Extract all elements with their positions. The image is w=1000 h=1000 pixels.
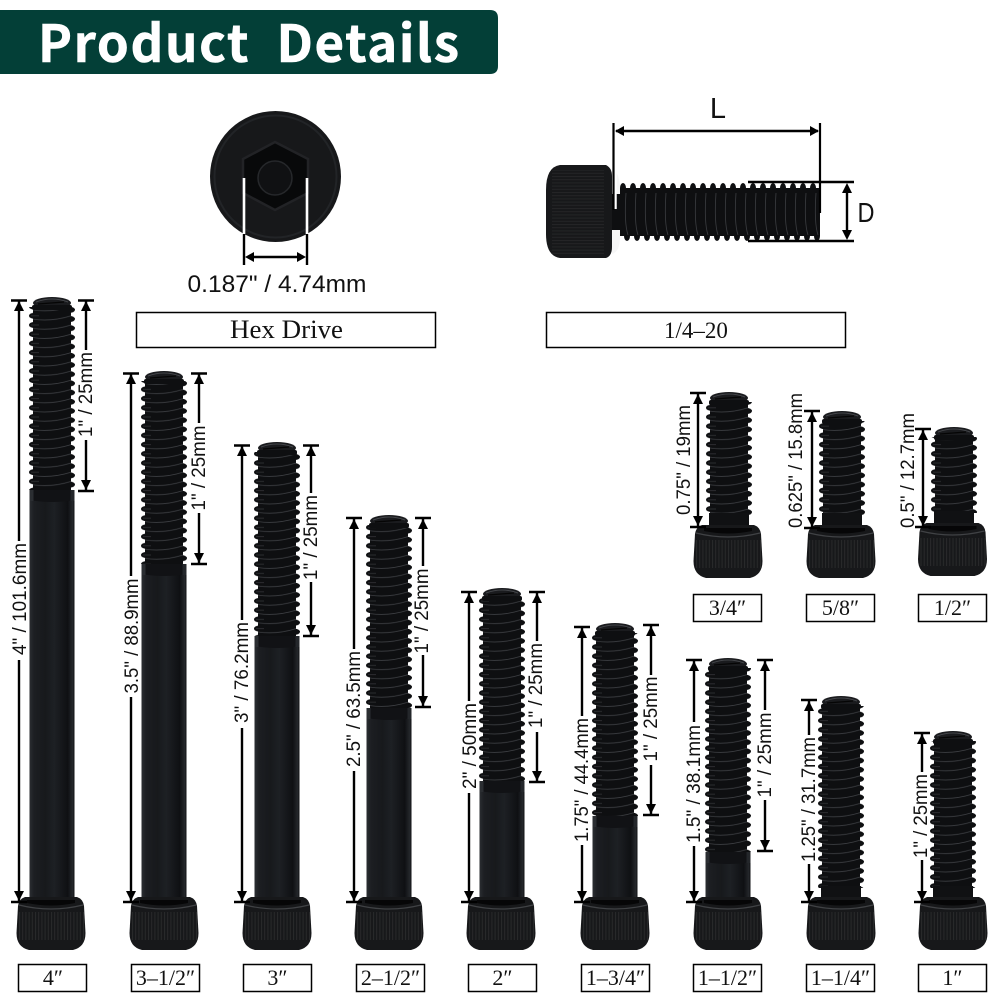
dimension letter D: D (858, 197, 874, 228)
dimension: 3 inch overall (231, 446, 253, 902)
dimension: 1 inch overall (910, 733, 932, 902)
size label 3: 3″ (267, 965, 288, 990)
size label 1-3/4: 1–3/4″ (586, 965, 645, 990)
hex drive size text: 0.187" / 4.74mm (188, 271, 366, 298)
bolt 5/8 inch (806, 411, 876, 578)
bolt 1 inch (918, 731, 988, 950)
dimension: 3/4 inch overall (673, 393, 706, 527)
size label 3 (244, 964, 312, 992)
dimension: 3-1/2 inch thread (188, 374, 210, 564)
dimension: 3 inch overall: 3" / 76.2mm (231, 622, 253, 723)
bolt 1-1/4 inch (806, 696, 876, 950)
dimension: 1-3/4 inch overall: 1.75" / 44.4mm (571, 718, 593, 842)
size label 1/2 (918, 594, 986, 622)
dimension: 4 inch thread (75, 300, 97, 491)
size label 4 (18, 964, 86, 992)
title banner: Product Details (38, 3, 459, 77)
bolt 1-1/2 inch (694, 658, 762, 950)
icon: side view bolt with L and D dimensions (546, 123, 854, 258)
size label 1-1/2: 1–1/2″ (698, 965, 757, 990)
size label 1: 1″ (942, 965, 963, 990)
dimension: 5/8 inch overall (785, 393, 820, 528)
bolt 1-3/4 inch (580, 623, 650, 950)
dimension: 5/8 inch overall: 0.625" / 15.8mm (785, 393, 807, 528)
dimension: 3 inch thread: 1" / 25mm (300, 495, 322, 580)
size label 5/8: 5/8″ (822, 595, 859, 620)
size label 3/4 (694, 594, 762, 622)
icon: hex drive end view (210, 111, 341, 265)
label: 1/4-20: 1/4–20 (664, 318, 728, 343)
dimension: 1/2 inch overall: 0.5" / 12.7mm (897, 413, 919, 528)
size label 3/4: 3/4″ (709, 595, 746, 620)
dimension: 1-1/4 inch overall: 1.25" / 31.7mm (798, 737, 820, 862)
size label 3-1/2: 3–1/2″ (136, 965, 195, 990)
dimension letter L: L (710, 93, 726, 125)
label: Hex Drive (136, 312, 436, 348)
bolt 2-1/2 inch (354, 515, 424, 950)
dimension: 2 inch thread: 1" / 25mm (525, 643, 547, 728)
dimension: 4 inch thread: 1" / 25mm (75, 352, 97, 437)
size label 2 (468, 964, 536, 992)
bolt 3/4 inch (694, 392, 762, 578)
dimension: 1/2 inch overall (897, 413, 931, 528)
dimension: 1-1/2 inch thread: 1" / 25mm (754, 712, 776, 798)
dimension: 4 inch overall (9, 300, 31, 902)
bolt 3 inch (242, 442, 312, 950)
dimension: 3-1/2 inch thread: 1" / 25mm (188, 426, 210, 510)
dimension: 3 inch thread (300, 446, 322, 636)
bolt 4 inch (16, 297, 86, 950)
dimension: 1-1/4 inch overall (798, 700, 820, 902)
dimension: 4 inch overall: 4" / 101.6mm (9, 543, 31, 655)
dimension: 1-1/2 inch overall: 1.5" / 38.1mm (683, 725, 705, 843)
label: Hex Drive: Hex Drive (230, 315, 343, 344)
dimension: 3-1/2 inch overall: 3.5" / 88.9mm (121, 578, 143, 694)
dimension: 1-3/4 inch thread (640, 625, 662, 815)
dimension: 1 inch overall: 1" / 25mm (910, 774, 932, 858)
dimension: 2-1/2 inch overall (343, 518, 365, 902)
size label 1 (918, 964, 986, 992)
dimension: 2-1/2 inch thread: 1" / 25mm (411, 568, 433, 654)
size label 2-1/2: 2–1/2″ (361, 965, 420, 990)
bolt 1/2 inch (918, 427, 987, 576)
dimension: 1-1/2 inch thread (754, 660, 776, 851)
size label 1/2: 1/2″ (934, 595, 971, 620)
bolt 3-1/2 inch (130, 371, 198, 950)
dimension: 2-1/2 inch thread (411, 518, 433, 707)
size label 5/8 (806, 594, 874, 622)
dimension: 3-1/2 inch overall (121, 374, 143, 902)
size label 1-1/4: 1–1/4″ (811, 965, 870, 990)
size label 2: 2″ (492, 965, 513, 990)
dimension: 1-3/4 inch thread: 1" / 25mm (640, 676, 662, 762)
dimension: 1-1/2 inch overall (683, 660, 705, 902)
dimension: 3/4 inch overall: 0.75" / 19mm (673, 405, 695, 515)
dimension: 2 inch overall (459, 592, 481, 902)
dimension: 2-1/2 inch overall: 2.5" / 63.5mm (343, 651, 365, 767)
bolt 2 inch (466, 588, 536, 950)
label: 1/4-20 (546, 312, 846, 348)
dimension: 2 inch overall: 2" / 50mm (459, 703, 481, 789)
size label 4: 4″ (43, 965, 63, 990)
dimension: 2 inch thread (525, 592, 547, 782)
dimension: 1-3/4 inch overall (571, 627, 593, 902)
